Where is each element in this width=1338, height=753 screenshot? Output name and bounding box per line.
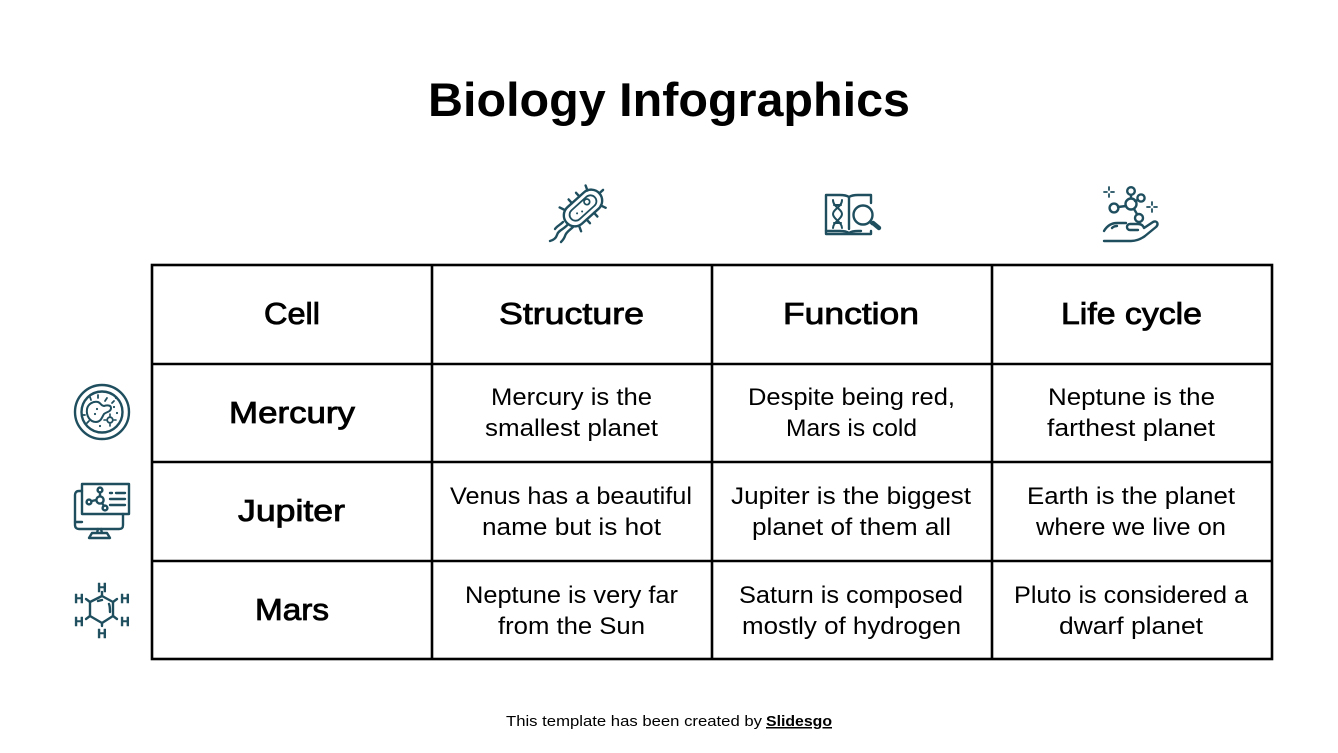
row: Mars: Neptune is very far bbox=[465, 582, 678, 609]
icon: benzene molecule: H bbox=[120, 591, 130, 606]
row: Jupiter: Jupiter bbox=[238, 493, 345, 528]
table header row: Function bbox=[783, 296, 919, 331]
table bbox=[152, 265, 1272, 659]
table header row: Cell bbox=[264, 296, 320, 331]
row: Jupiter: where we live on bbox=[1035, 514, 1226, 541]
icon: book with DNA and magnifier bbox=[826, 195, 879, 234]
icon: benzene molecule: H bbox=[120, 614, 130, 629]
row: Jupiter: Earth is the planet bbox=[1027, 483, 1235, 510]
icon: benzene molecule: H bbox=[97, 626, 107, 641]
row: Mars: mostly of hydrogen bbox=[742, 613, 961, 640]
icon: petri dish bbox=[75, 385, 129, 439]
row: Mercury: Mercury bbox=[229, 395, 356, 430]
row: Mercury: Mercury is the bbox=[491, 384, 652, 411]
footer credit: This template has been created by bbox=[506, 713, 763, 730]
title: Biology Infographics bbox=[428, 73, 910, 126]
row: Mercury: Mars is cold bbox=[786, 415, 917, 442]
row: Mars bbox=[255, 582, 1249, 640]
row: Jupiter: Venus has a beautiful bbox=[450, 483, 692, 510]
row: Jupiter: planet of them all bbox=[752, 514, 951, 541]
row: Mercury bbox=[229, 384, 1215, 442]
table header row: Life cycle bbox=[1061, 296, 1202, 331]
row: Mars: from the Sun bbox=[498, 613, 645, 640]
row: Mars: Saturn is composed bbox=[739, 582, 963, 609]
icon: benzene molecule: H bbox=[74, 614, 84, 629]
row: Jupiter: name but is hot bbox=[482, 514, 661, 541]
row: Mercury: farthest planet bbox=[1047, 415, 1215, 442]
footer credit: Slidesgo bbox=[766, 713, 832, 730]
row: Mars: Pluto is considered a bbox=[1014, 582, 1249, 609]
table header row: Structure bbox=[499, 296, 644, 331]
row: Jupiter: Jupiter is the biggest bbox=[731, 483, 971, 510]
row: Mercury: smallest planet bbox=[485, 415, 658, 442]
table header row bbox=[264, 296, 1202, 331]
row: Mars: dwarf planet bbox=[1059, 613, 1203, 640]
icon: bacterium bbox=[550, 178, 614, 242]
row: Mars: Mars bbox=[255, 592, 329, 627]
icon: benzene molecule bbox=[74, 580, 130, 641]
row: Jupiter bbox=[238, 483, 1235, 541]
icon: benzene molecule: H bbox=[74, 591, 84, 606]
row: Mercury: Despite being red, bbox=[748, 384, 955, 411]
icon: computer with molecule bbox=[75, 484, 129, 538]
icon: hand holding molecule bbox=[1104, 187, 1157, 241]
icon: benzene molecule: H bbox=[97, 580, 107, 595]
row: Mercury: Neptune is the bbox=[1048, 384, 1215, 411]
